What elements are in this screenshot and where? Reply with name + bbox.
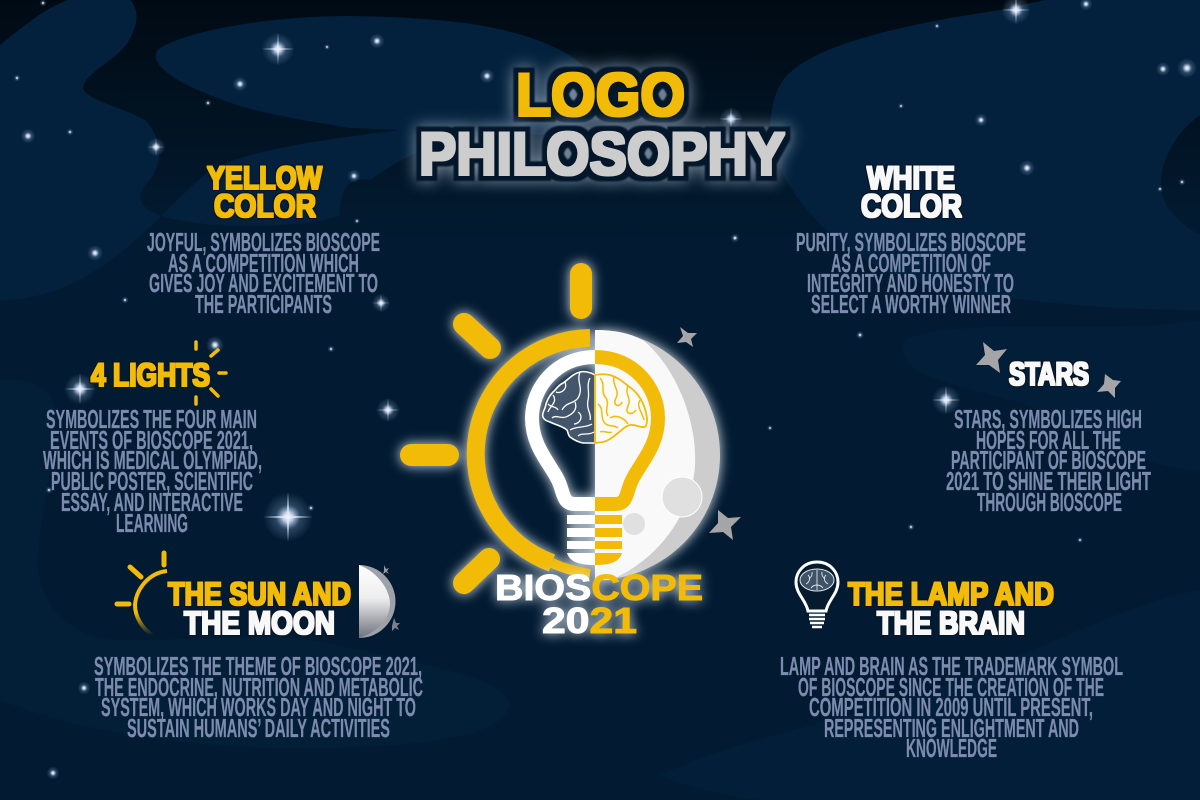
central logo [411,274,741,641]
logo wordmark: BIOSCOPE [495,567,703,608]
panel: stars: STARS [1009,356,1089,392]
panel: white color: SELECT A WORTHY WINNER [811,289,1011,319]
logo stars [677,327,741,540]
panel: white color: COLOR [861,188,962,224]
icon: sun [117,553,167,635]
panel: white color [796,160,1026,319]
icon: small stars [976,342,1121,398]
panel: 4 lights: LEARNING [116,508,188,538]
panel: the sun and the moon: THE ENDOCRINE, NUTRITION AND METABOLIC [95,672,423,702]
panel: yellow color: JOYFUL, SYMBOLIZES BIOSCOPE [147,227,380,257]
lamp bulb [532,357,658,504]
panel: 4 lights: WHICH IS MEDICAL OLYMPIAD, [43,445,262,475]
icon: moon [359,565,400,638]
panel: 4 lights: EVENTS OF BIOSCOPE 2021, [50,425,253,455]
panel: 4 lights: ESSAY, AND INTERACTIVE [61,487,243,517]
panel: yellow color [147,160,380,319]
moon craters [623,477,702,535]
panel: the lamp and the brain: THE LAMP AND [848,576,1054,612]
panel: the sun and the moon: SUSTAIN HUMANS’ DAILY ACTIVITIES [127,713,390,743]
title [419,62,785,188]
panel: the lamp and the brain: KNOWLEDGE [906,733,997,763]
panel: the lamp and the brain [780,562,1123,763]
panel: the sun and the moon: THE SUN AND [168,576,351,612]
panel: the sun and the moon: SYMBOLIZES THE THEME OF BIOSCOPE 2021, [94,651,422,681]
panel: yellow color: COLOR [214,188,316,224]
icon: lamp with brain [796,562,838,627]
panel: white color: AS A COMPETITION OF [831,248,991,278]
panel: yellow color: GIVES JOY AND EXCITEMENT TO [149,268,378,298]
panel: the lamp and the brain: THE BRAIN [877,605,1025,641]
panel: yellow color: YELLOW [207,160,323,196]
sun rays [411,274,581,583]
logo wordmark: 2021 [542,600,637,641]
brain [543,372,647,443]
lamp screw [567,515,622,565]
panel: the sun and the moon: THE MOON [184,605,335,641]
panel: 4 lights [43,342,262,538]
sun ring [476,338,590,563]
panel: 4 lights: 4 LIGHTS [91,357,210,393]
moon [595,330,720,580]
panel: yellow color: THE PARTICIPANTS [195,289,332,319]
panel: yellow color: AS A COMPETITION WHICH [168,248,359,278]
title: PHILOSOPHY [419,120,785,188]
logo wordmark [495,567,703,641]
panel: stars [946,342,1151,517]
icon: sun and moon lamp [411,274,720,583]
panel: white color: INTEGRITY AND HONESTY TO [807,268,1014,298]
panel: white color: WHITE [867,160,955,196]
panel: 4 lights: PUBLIC POSTER, SCIENTIFIC [51,466,253,496]
panel: the sun and the moon: SYSTEM, WHICH WORKS DAY AND NIGHT TO [101,692,416,722]
title: LOGO [516,62,685,128]
panel: the sun and the moon [94,553,423,743]
icon: light rays [196,342,226,404]
panel: 4 lights: SYMBOLIZES THE FOUR MAIN [46,404,257,434]
